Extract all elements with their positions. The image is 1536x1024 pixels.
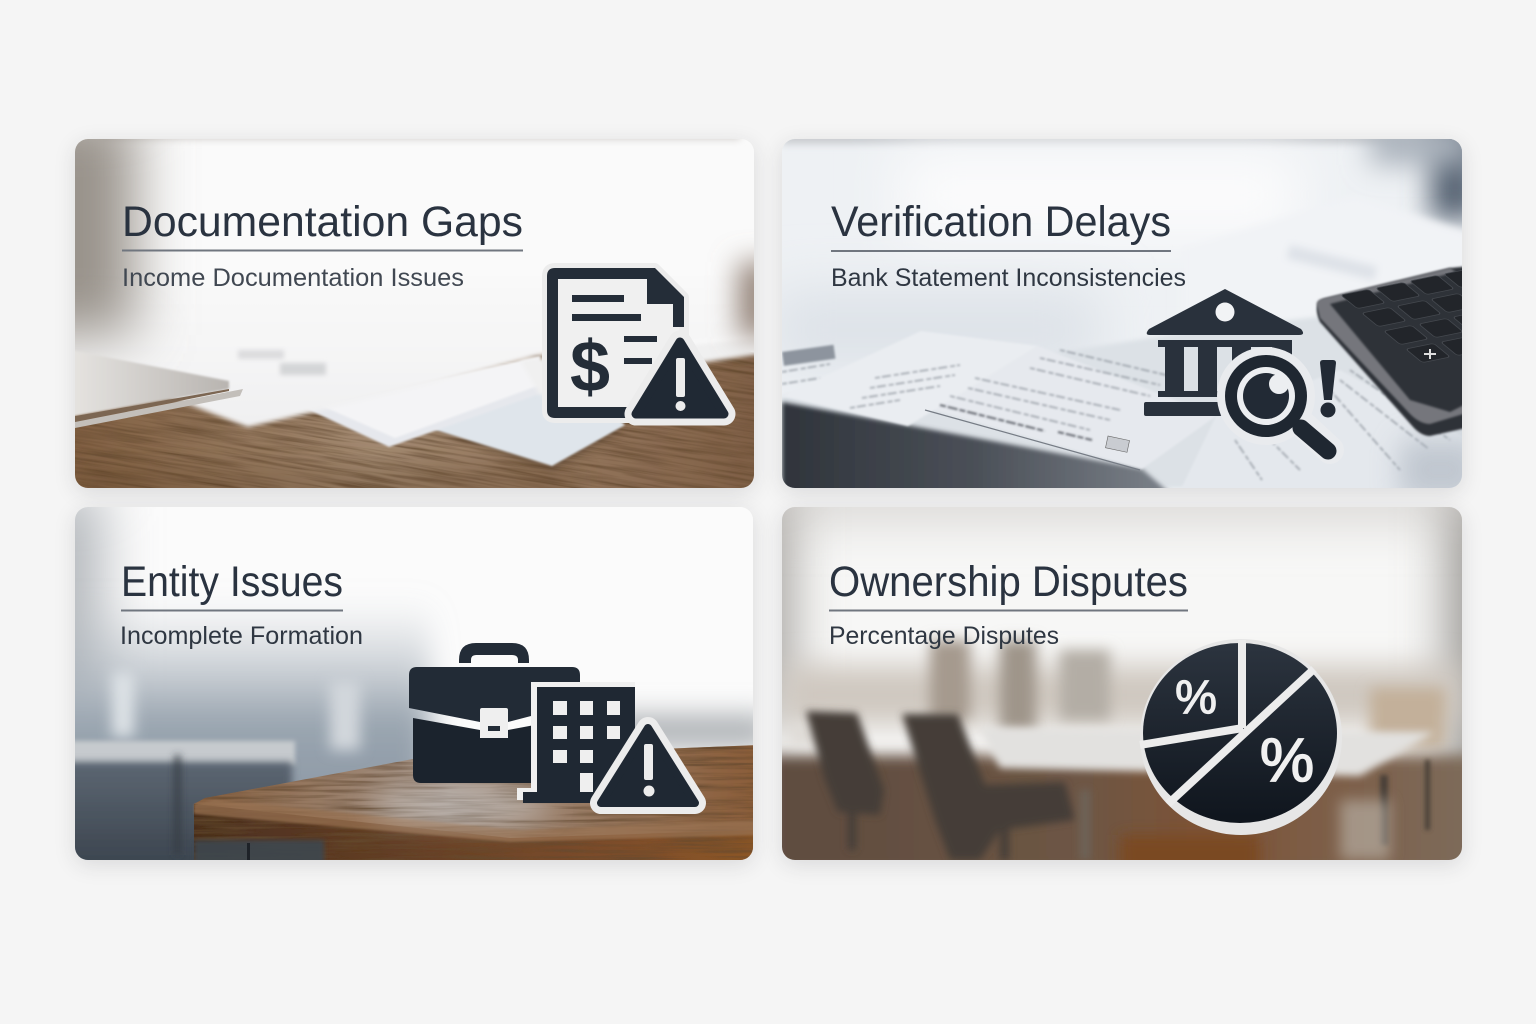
document bbox=[547, 268, 684, 418]
icon: pie chart with percent signs bbox=[1140, 639, 1342, 835]
panel: Entity Issues bbox=[75, 507, 753, 860]
calculator bbox=[1317, 265, 1497, 436]
heading: Ownership Disputes bbox=[829, 559, 1188, 606]
percent label small: % bbox=[1175, 670, 1217, 723]
exclamation mark bbox=[1320, 360, 1336, 418]
background photo: papers on a wooden desk bbox=[75, 139, 754, 488]
briefcase bbox=[409, 643, 580, 783]
background photo: bank statements and calculator bbox=[782, 139, 1462, 488]
icon: briefcase, office building and warning triangle bbox=[409, 643, 695, 803]
card foreground: text and icon bbox=[831, 199, 1336, 460]
percent label large: % bbox=[1260, 726, 1314, 794]
subheading: Income Documentation Issues bbox=[122, 264, 464, 292]
card foreground: text and icon bbox=[120, 559, 706, 814]
subheading: Percentage Disputes bbox=[829, 622, 1059, 650]
icon: bank with magnifier and exclamation mark bbox=[1144, 289, 1336, 451]
document: $ bbox=[570, 327, 610, 407]
subheading: Bank Statement Inconsistencies bbox=[831, 264, 1186, 292]
chairs bbox=[806, 711, 1090, 860]
heading: Entity Issues bbox=[121, 559, 343, 606]
bank building bbox=[1144, 289, 1303, 416]
warning triangle bbox=[636, 342, 724, 414]
card foreground: text and icon bbox=[829, 559, 1341, 835]
heading: Documentation Gaps bbox=[122, 199, 523, 246]
office building bbox=[517, 682, 635, 803]
heading: Verification Delays bbox=[831, 199, 1171, 246]
magnifying glass bbox=[1217, 347, 1330, 451]
panel: Documentation Gaps bbox=[75, 139, 754, 488]
panel: Verification Delays bbox=[782, 139, 1462, 488]
background photo: blurred office with wooden table bbox=[75, 507, 753, 860]
card foreground: text and icon bbox=[122, 199, 736, 426]
panel: Ownership Disputes bbox=[782, 507, 1462, 860]
background photo: blurred conference room bbox=[782, 507, 1462, 860]
icon: dollar document with warning triangle bbox=[547, 268, 724, 418]
warning triangle bbox=[601, 728, 695, 803]
subheading: Incomplete Formation bbox=[120, 622, 363, 650]
